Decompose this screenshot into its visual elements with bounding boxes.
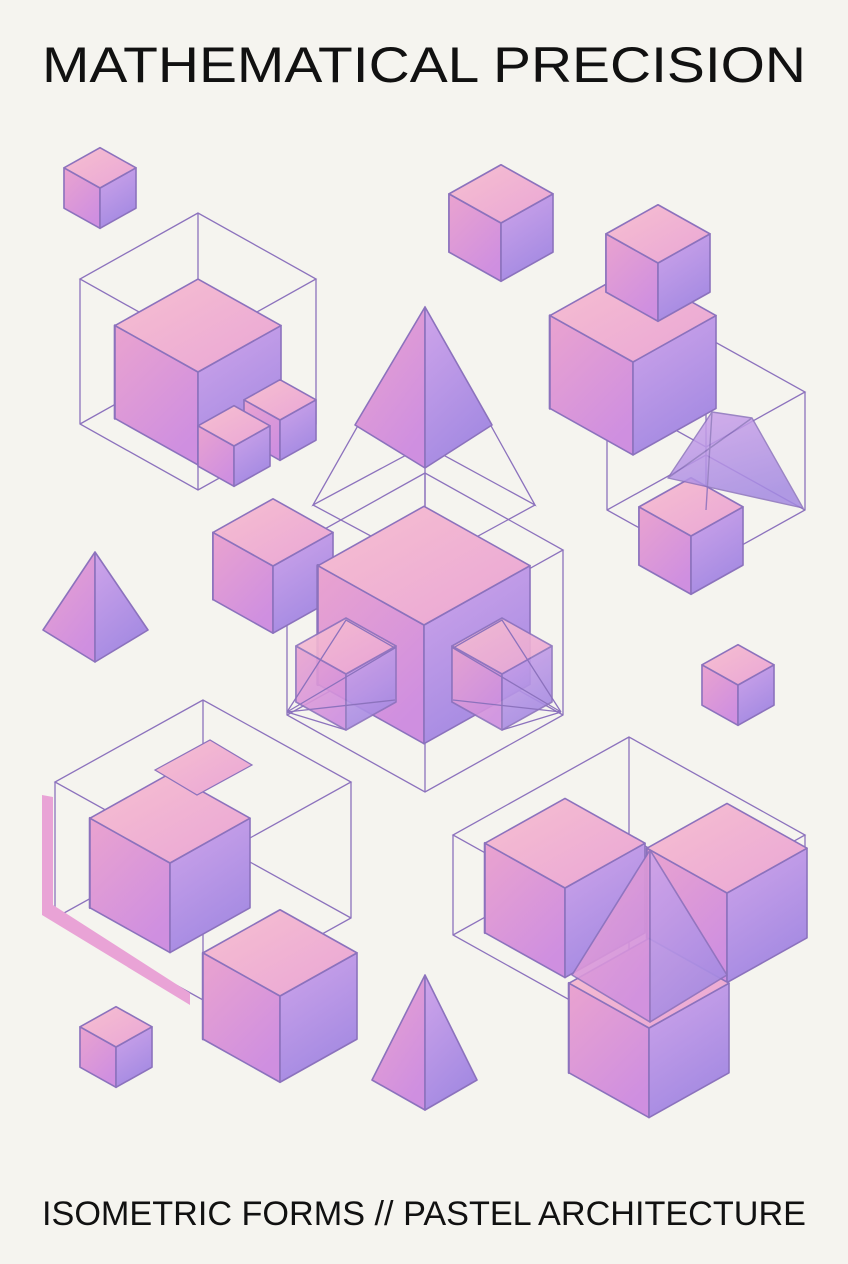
wireframe: lower left [55,700,351,1000]
cube: mid left [213,499,333,633]
cube: central right small with pyramid [452,618,561,730]
cube: small right [702,645,774,725]
cube: small bottom left [80,1007,152,1087]
cube: central left small with pyramid [287,618,396,730]
cube: main left [115,279,281,465]
cube: small right of main [244,380,316,460]
pyramid: bottom center [372,975,477,1110]
cube cluster: lower right [485,798,807,1118]
pyramid: left [43,552,148,662]
wireframe: lower right [453,737,805,1033]
wireframe: left cluster [80,213,316,490]
cube: large upper right [550,269,716,455]
cube: top right [606,205,710,321]
pyramid: top center [355,307,492,468]
pink strip lower left [42,795,190,1005]
wireframe: center cluster [287,307,563,792]
cube: lower left middle [203,910,357,1082]
cube: small top left [64,148,136,228]
cube: lower left [90,773,250,953]
cube: top center [449,165,553,281]
wireframe: upper right [607,337,805,565]
title: MATHEMATICAL PRECISION [42,37,806,93]
tilted pyramid upper right [668,412,803,510]
cube: small below main [198,406,270,486]
subtitle: ISOMETRIC FORMS // PASTEL ARCHITECTURE [42,1195,806,1233]
cube: upper right lower [639,478,743,594]
cube: central big [318,506,530,744]
tile: flat lower left [155,740,252,795]
